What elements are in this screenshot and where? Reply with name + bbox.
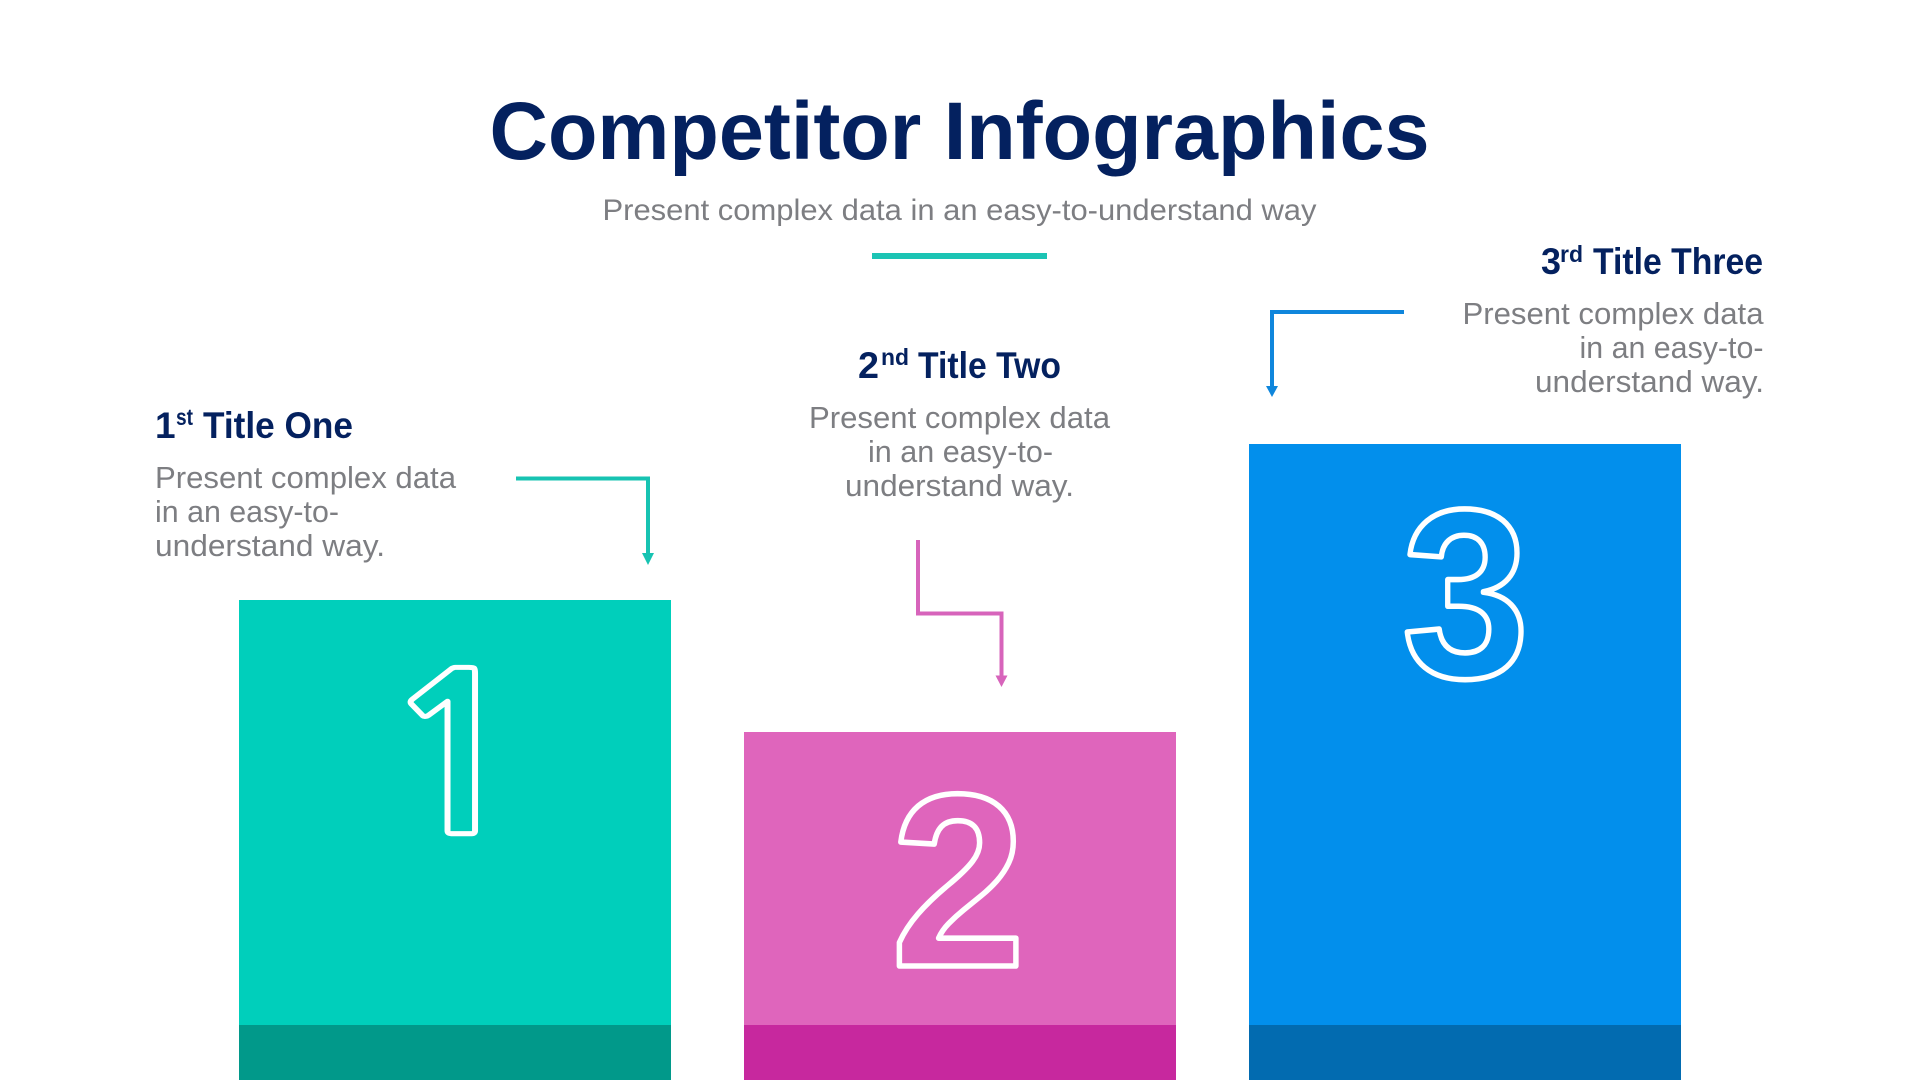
panel: second place [744,344,1176,1080]
subtitle: Present complex data in an easy-to-understand way [602,194,1316,227]
heading: 2nd Title Two: nd [881,344,909,370]
description text: Present complex data [809,400,1111,435]
heading: 1st Title One: 1 [155,405,176,446]
description text: understand way. [845,468,1074,503]
description text [809,400,1111,503]
title: Competitor Infographics [490,86,1430,177]
number 2 outline: 2 [891,743,1026,1019]
panel: third place [1249,241,1764,1080]
description text: in an easy-to- [155,494,339,529]
bar: teal [239,600,671,1080]
description text [155,460,457,563]
heading: 2nd Title Two: 2 [858,345,879,386]
title accent bar [872,253,1047,259]
description text: Present complex data [1462,296,1764,331]
description text: in an easy-to- [1580,330,1764,365]
heading: 3rd Title Three: rd [1560,241,1583,267]
heading: 3rd Title Three: 3 [1541,241,1561,282]
heading: 2nd Title Two: Title Two [918,345,1061,386]
description text: Present complex data [155,460,457,495]
heading: 1st Title One: Title One [203,405,353,446]
arrow: blue elbow [1266,312,1404,397]
number 3 outline: 3 [1402,459,1529,728]
arrow: teal elbow [516,478,654,565]
heading: 2nd Title Two [858,344,1061,386]
description text: understand way. [155,528,385,563]
heading: 1st Title One: st [176,404,193,430]
heading: 3rd Title Three: Title Three [1593,241,1763,282]
bar: pink [744,732,1176,1080]
description text: in an easy-to- [868,434,1053,469]
panel: first place [155,404,671,1080]
bar: blue [1249,444,1681,1080]
arrow: pink stepped [918,540,1008,687]
description text [1462,296,1764,399]
description text: understand way. [1535,364,1764,399]
number 1 outline: 1 [378,649,533,866]
